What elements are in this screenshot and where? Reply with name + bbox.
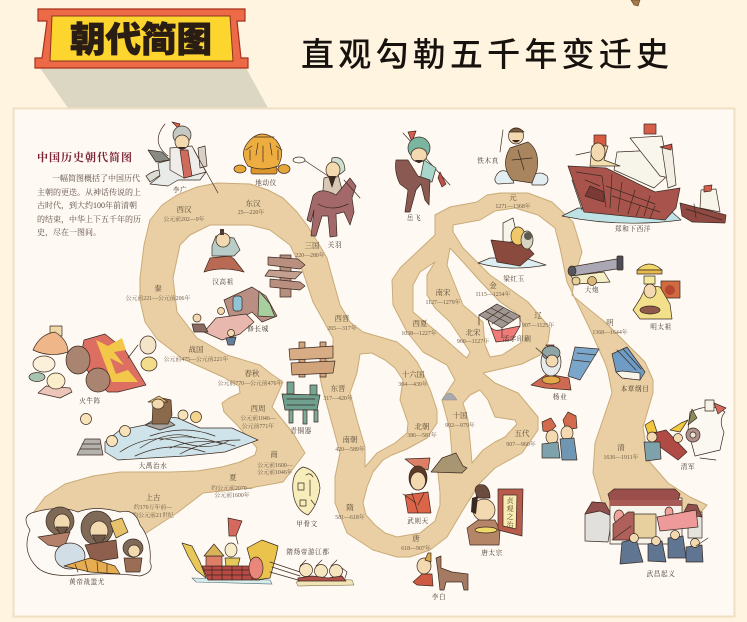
road labels: 1127—1279年	[425, 298, 461, 306]
road labels: 公元前1600—	[257, 461, 293, 469]
road labels: 1115—1234年	[476, 290, 511, 298]
road labels: 南朝	[342, 434, 358, 444]
caption: 甲骨文	[296, 519, 318, 528]
road labels: 960—1127年	[457, 337, 489, 345]
caption: 岳飞	[407, 213, 421, 222]
road labels: 十六国	[402, 369, 425, 379]
illustration: 大炮	[568, 256, 623, 294]
road labels	[126, 193, 639, 552]
road labels: 907—1125年	[522, 321, 554, 329]
illustration: 小船	[680, 185, 726, 223]
road labels: 公元前221—公元前206年	[126, 294, 191, 302]
road labels: 约公元前21世纪	[132, 511, 174, 519]
illustration: 明太祖	[633, 264, 680, 331]
road labels: 1038—1227年	[401, 329, 437, 337]
road labels: 1271—1368年	[495, 202, 531, 210]
icon: top edge fragment	[631, 0, 640, 6]
road labels: 北宋	[466, 327, 481, 337]
caption: 隋炀帝游江都	[286, 547, 330, 556]
road labels: 公元前771年	[242, 422, 274, 430]
road labels: 十国	[452, 410, 468, 420]
road labels: 西周	[250, 404, 266, 413]
road labels: 辽	[534, 311, 542, 320]
caption: 关羽	[328, 240, 342, 249]
road labels: 明	[606, 318, 614, 327]
caption: 铁木真	[477, 156, 499, 165]
illustration: 甲骨文	[293, 467, 320, 528]
road labels: 三国	[304, 241, 320, 250]
caption: 大炮	[585, 285, 599, 294]
banner shadow	[40, 68, 268, 108]
illustration: 岳飞	[396, 131, 450, 222]
road labels: 公元前770—公元前476年	[218, 379, 283, 387]
road labels: 春秋	[244, 368, 260, 378]
road labels: 商	[270, 449, 278, 459]
signpost 2	[289, 342, 335, 377]
illustration: 贞观之治卷轴: 贞	[506, 496, 514, 505]
illustration: 郑和宝船	[562, 124, 681, 233]
illustration: 清军	[644, 400, 726, 471]
title banner	[35, 9, 248, 68]
road labels: 北朝	[414, 421, 430, 431]
illustration: 铁木真	[477, 128, 548, 185]
caption: 武则天	[407, 516, 429, 525]
road labels: 西晋	[334, 314, 350, 323]
illustration: 隋炀帝龙舟	[182, 518, 354, 586]
illustration: 汉高祖	[204, 229, 244, 286]
illustration: 大禹治水	[77, 396, 258, 470]
illustration: 火牛阵	[29, 326, 157, 405]
intro paragraph: 主朝的更迭。从神话传说的上	[37, 187, 141, 197]
illustration: 贞观之治卷轴: 之	[506, 512, 514, 521]
road labels: 420—589年	[335, 445, 365, 453]
caption: 唐太宗	[481, 548, 503, 557]
sub-element: soldiers	[620, 530, 708, 564]
road labels: 东汉	[246, 198, 261, 208]
road labels: 1368—1644年	[592, 328, 628, 336]
road labels: 265—317年	[327, 324, 357, 332]
illustration: 黄帝战蚩尤	[26, 507, 151, 586]
road labels: 秦	[154, 283, 162, 293]
road labels: 唐	[412, 533, 420, 543]
road labels: 公元前202—9年	[163, 215, 205, 223]
sails	[614, 150, 665, 188]
illustration: 地动仪	[234, 134, 290, 187]
road labels: 581—618年	[335, 513, 365, 521]
road labels: 约公元前2070—	[211, 484, 253, 492]
intro paragraph: 古时代，到大约100年前清朝	[37, 200, 137, 211]
road labels: 西夏	[412, 319, 428, 328]
caption: 汉高祖	[212, 277, 234, 286]
illustration: 关羽	[293, 157, 360, 249]
road labels: 公元前1046—	[240, 414, 276, 422]
road labels: 金	[489, 280, 497, 290]
road labels: 东晋	[330, 383, 346, 393]
illustration: 五代人物	[542, 412, 577, 460]
road labels: 战国	[188, 344, 204, 354]
illustration: 李广	[146, 122, 218, 194]
illustration: 贞观之治卷轴: 治	[506, 520, 514, 529]
caption: 活字印刷	[503, 334, 531, 343]
illustration: 本草纲目	[612, 347, 649, 393]
illustration: 修长城	[192, 287, 277, 345]
road labels: 清	[617, 442, 625, 452]
illustration: 李白	[413, 553, 468, 601]
illustration: 青铜器	[282, 382, 320, 435]
road labels: 南宋	[436, 287, 451, 297]
road labels: 317—420年	[323, 394, 353, 402]
illustration: 杨业	[531, 345, 599, 401]
intro heading: 中国历史朝代简图	[37, 150, 132, 164]
caption: 黄帝战蚩尤	[69, 577, 105, 586]
illustration: 贞观之治卷轴: 观	[506, 504, 514, 513]
road labels: 1636—1911年	[603, 453, 639, 461]
illustration: 武昌起义城门	[585, 489, 708, 578]
road labels: 618—907年	[401, 544, 431, 552]
caption: 火牛阵	[79, 396, 101, 405]
illustration: 贞观之治卷轴	[498, 489, 523, 536]
caption: 清军	[681, 462, 695, 471]
caption: 杨业	[553, 392, 567, 401]
road labels: 25—220年	[238, 208, 264, 216]
caption: 武昌起义	[647, 569, 675, 578]
illustration: 武则天	[403, 458, 431, 525]
road labels: 约170万年前—	[134, 503, 172, 511]
figure	[594, 135, 606, 146]
road labels: 元	[509, 193, 517, 202]
road labels: 907—960年	[506, 440, 536, 448]
road labels: 220—280年	[295, 251, 325, 259]
hull	[568, 166, 680, 220]
road labels: 902—979年	[445, 421, 475, 429]
caption: 青铜器	[290, 426, 312, 435]
intro paragraph: 的结束，中华上下五千年的历	[37, 214, 141, 225]
caption: 郑和下西洋	[615, 224, 651, 233]
illustration: 梁红玉战船	[478, 218, 546, 283]
subtitle: 直观勾勒五千年变迁史	[301, 36, 669, 73]
road labels: 公元前475—公元前221年	[164, 355, 229, 363]
road labels: 304—439年	[398, 380, 428, 388]
icon: grey hill	[442, 393, 457, 400]
intro paragraph: 一幅简图概括了中国历代	[52, 173, 140, 183]
road labels: 五代	[514, 428, 530, 438]
road labels: 夏	[229, 473, 237, 482]
caption: 修长城	[247, 324, 269, 333]
caption: 地动仪	[255, 178, 277, 187]
road labels: 西汉	[176, 205, 192, 214]
illustration: 唐太宗	[467, 485, 503, 557]
panel: map background	[14, 108, 734, 616]
road labels: 隋	[346, 502, 354, 512]
intro paragraph	[37, 173, 141, 238]
road labels: 上古	[146, 492, 161, 502]
illustration: 活字印刷	[479, 304, 531, 343]
caption: 李广	[173, 185, 187, 194]
signpost 1	[265, 255, 305, 297]
intro paragraph: 史，尽在一图间。	[37, 227, 101, 238]
icon: brown rock	[431, 453, 467, 473]
caption: 梁红玉	[503, 274, 525, 283]
caption: 明太祖	[650, 322, 672, 331]
caption: 本草纲目	[621, 384, 649, 393]
road labels: 公元前1046年	[257, 468, 293, 476]
road labels: 386—581年	[407, 431, 437, 439]
road labels: 公元前1600年	[214, 491, 250, 499]
caption: 李白	[432, 592, 446, 601]
heading: 朝代简图: 朝代简图	[70, 21, 212, 60]
caption: 大禹治水	[139, 461, 167, 470]
road: dynasty timeline path	[33, 183, 707, 557]
